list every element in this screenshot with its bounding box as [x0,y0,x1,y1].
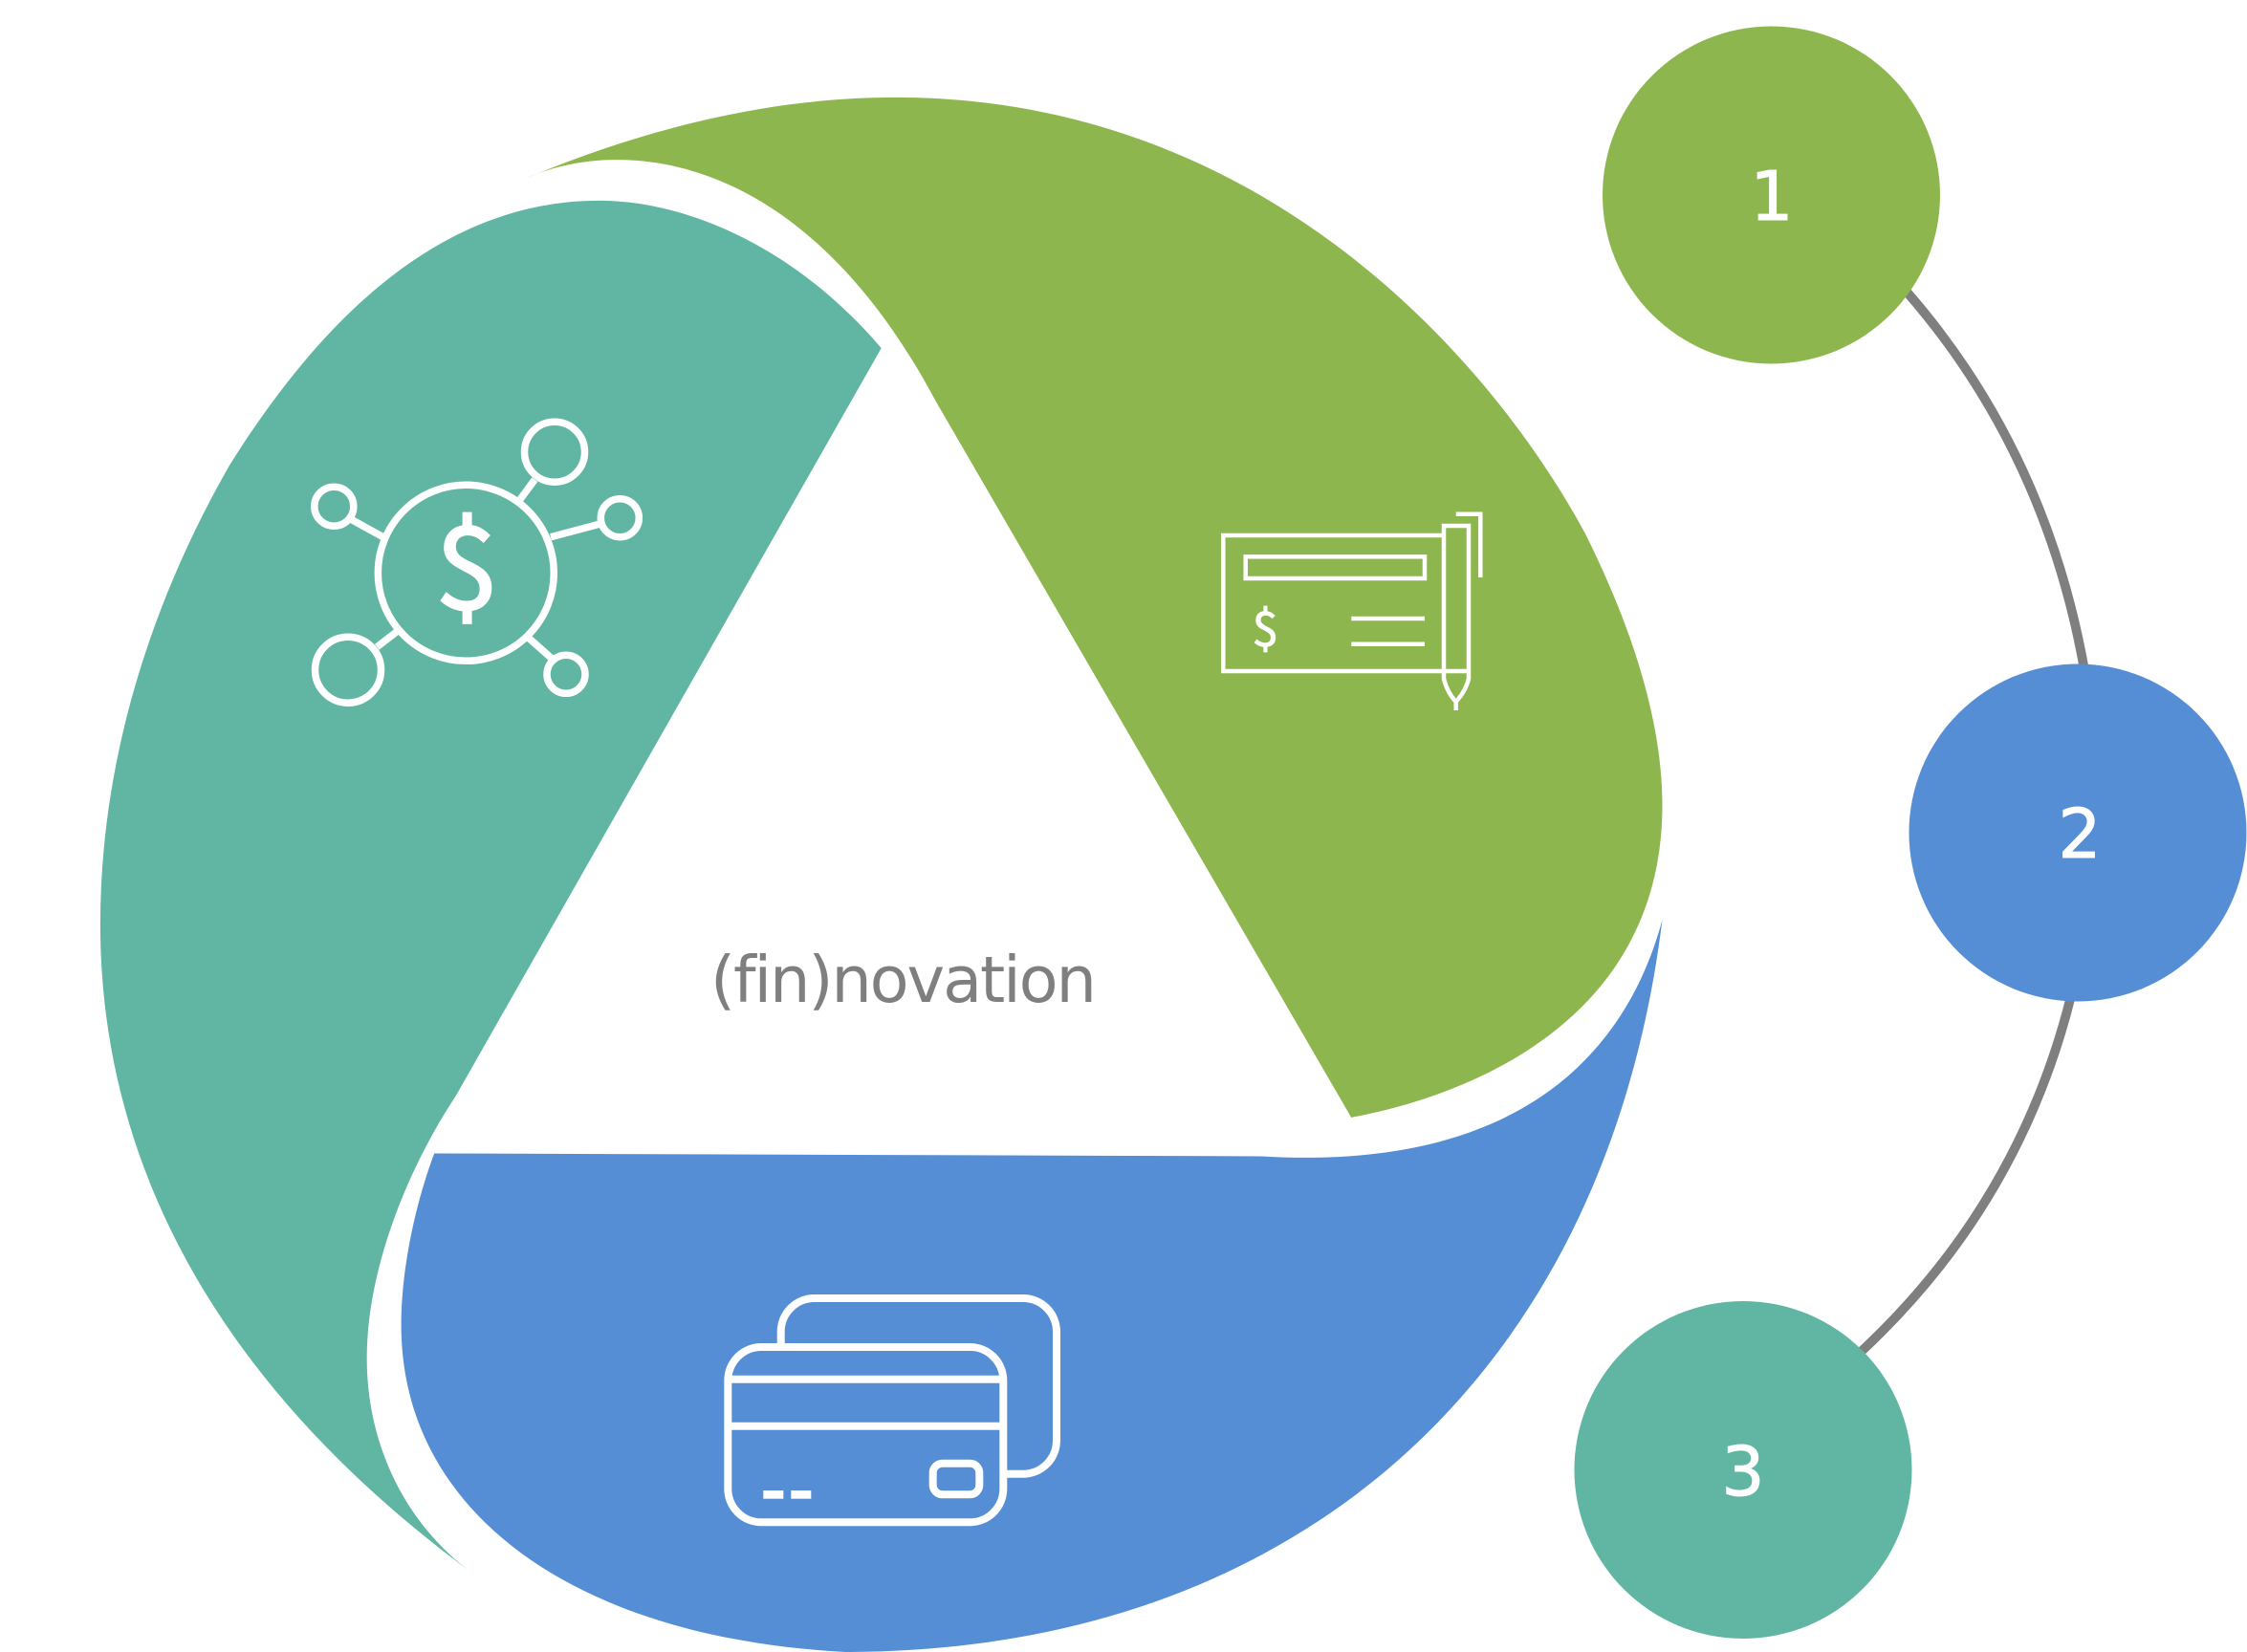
number circle 3 [1574,1301,1912,1639]
number circle 2: 2 [2058,794,2102,874]
number circle 2 [1909,663,2247,1002]
center title: (fin)novation [710,943,1097,1017]
icon: dollar network [315,422,639,703]
icon: dollar network: $ [435,476,498,642]
connector: arc from circle 1 to circle 2 [1906,291,2085,673]
icon: cheque and pen [1223,514,1480,710]
petal: blue [402,920,1662,1652]
connector: arc from circle 2 to circle 3 [1860,991,2072,1353]
icon: cheque and pen: $ [1252,592,1278,661]
number circle 1: 1 [1750,157,1794,236]
petal: teal [100,201,882,1571]
petal: green [528,98,1662,1118]
number circle 1 [1603,27,1940,363]
number circle 3: 3 [1721,1432,1765,1511]
icon: credit cards [728,1298,1057,1522]
